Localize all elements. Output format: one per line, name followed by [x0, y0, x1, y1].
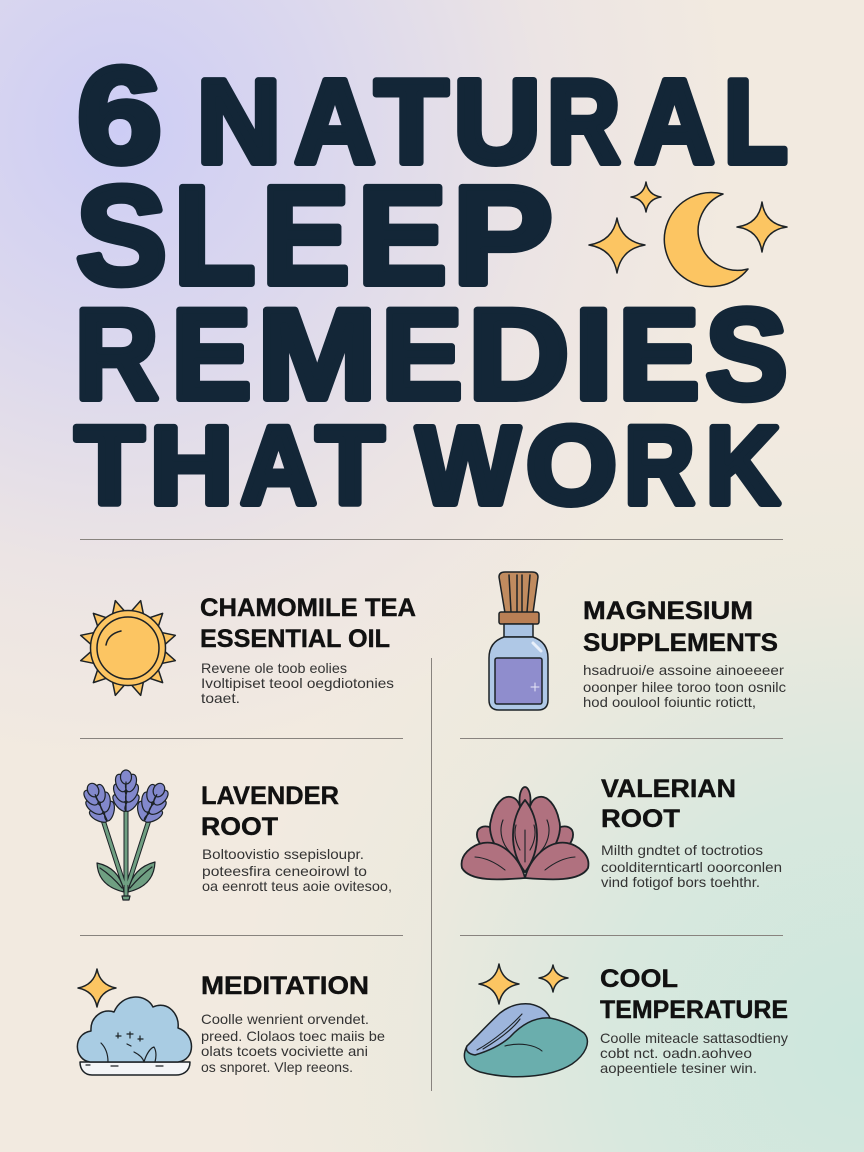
- title: T: [316, 404, 384, 528]
- title: H: [150, 404, 233, 528]
- heading: SUPPLEMENTS: [583, 629, 778, 657]
- body text: hod ooulool foiuntic rotictt,: [583, 694, 756, 710]
- heading: ESSENTIAL OIL: [200, 625, 390, 653]
- body text: Ivoltipiset teool oegdiotonies: [201, 675, 394, 691]
- body text: Boltoovistio ssepisloupr.: [202, 846, 364, 862]
- body text: ooonper hilee toroo toon osnilc: [583, 679, 786, 695]
- title: N: [197, 56, 281, 188]
- panel: valerian root: [462, 775, 782, 890]
- body text: [201, 660, 394, 706]
- panel: magnesium supplements: [489, 572, 786, 710]
- icon: lavender: [76, 770, 176, 900]
- title: P: [452, 158, 553, 314]
- heading: COOL: [600, 965, 678, 993]
- body text: cobt nct. oadn.aohveo: [600, 1045, 752, 1061]
- dividers: [80, 540, 783, 1091]
- body text: poteesfira ceneoirowl to: [202, 863, 367, 879]
- icon: pillow and stars: [464, 964, 587, 1077]
- heading: ROOT: [601, 805, 680, 833]
- title: R: [75, 284, 158, 426]
- body text: Coolle wenrient orvendet.: [201, 1011, 369, 1027]
- title: T: [375, 56, 448, 188]
- title: R: [547, 56, 620, 188]
- heading: [200, 594, 416, 653]
- body text: olats tcoets vociviette ani: [201, 1043, 368, 1059]
- body text: preed. Clolaos toec maiis be: [201, 1028, 385, 1044]
- heading: TEMPERATURE: [600, 996, 788, 1024]
- title: W: [416, 404, 520, 528]
- title: R: [624, 404, 694, 528]
- title: I: [574, 284, 613, 426]
- title: K: [706, 404, 780, 528]
- body text: [202, 846, 392, 894]
- title: M: [257, 284, 377, 426]
- title: A: [240, 404, 316, 528]
- panel: chamomile tea essential oil: [79, 594, 416, 706]
- body text: Milth gndtet of toctrotios: [601, 842, 763, 858]
- icon: cloud and star: [77, 969, 192, 1075]
- title: S: [76, 158, 167, 314]
- body text: Revene ole toob eolies: [201, 660, 347, 676]
- title: T: [75, 404, 144, 528]
- body text: oa eenrott teus aoie ovitesoo,: [202, 878, 392, 894]
- heading: [601, 775, 736, 833]
- heading: MAGNESIUM: [583, 597, 753, 625]
- title: L: [724, 56, 788, 188]
- title: S: [706, 284, 788, 426]
- body text: vind fotigof bors toehthr.: [601, 874, 760, 890]
- heading: [583, 597, 778, 657]
- title: E: [358, 158, 447, 314]
- title: E: [381, 284, 462, 426]
- heading: VALERIAN: [601, 775, 736, 803]
- title: E: [618, 284, 700, 426]
- panel: lavender root: [76, 770, 392, 900]
- title: O: [526, 404, 617, 528]
- body text: [583, 662, 786, 710]
- body text: Coolle miteacle sattasodtieny: [600, 1030, 788, 1046]
- body text: toaet.: [201, 690, 240, 706]
- title: 6: [77, 39, 162, 191]
- icon: moon and stars: [589, 182, 787, 287]
- heading: LAVENDER: [201, 782, 339, 810]
- icon: bottle: [489, 572, 548, 710]
- title: [75, 39, 788, 528]
- heading: [201, 782, 339, 841]
- body text: coolditernticartl ooorconlen: [601, 859, 782, 875]
- title: D: [468, 284, 569, 426]
- title: E: [172, 284, 251, 426]
- body text: [601, 842, 782, 890]
- title: A: [294, 56, 376, 188]
- heading: CHAMOMILE TEA: [200, 594, 416, 622]
- panel: meditation: [77, 969, 385, 1075]
- title: L: [173, 158, 256, 314]
- body text: hsadruoi/e assoine ainoeeeer: [583, 662, 784, 678]
- heading: ROOT: [201, 813, 278, 841]
- icon: valerian root: [462, 787, 588, 879]
- title: U: [454, 56, 541, 188]
- title: E: [262, 158, 350, 314]
- body text: aopeentiele tesiner win.: [600, 1060, 757, 1076]
- body text: [600, 1030, 788, 1076]
- icon: sun: [79, 599, 177, 697]
- panel: cool temperature: [464, 964, 788, 1077]
- body text: [201, 1011, 385, 1075]
- heading: [600, 965, 788, 1024]
- heading: MEDITATION: [201, 972, 369, 1000]
- body text: os snporet. Vlep reeons.: [201, 1059, 353, 1075]
- title: A: [634, 56, 714, 188]
